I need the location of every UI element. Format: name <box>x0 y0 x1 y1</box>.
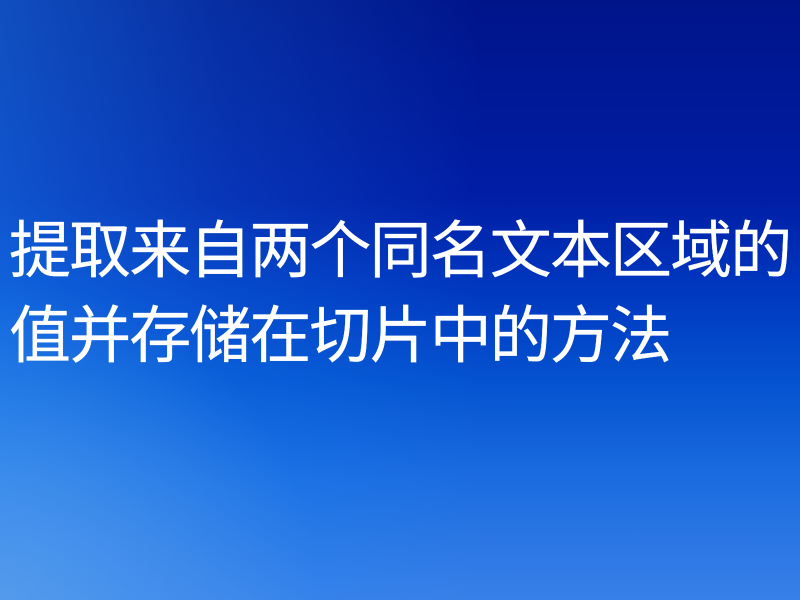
title: 值并存储在切片中的方法 <box>9 302 670 371</box>
title: 提取来自两个同名文本区域的 <box>9 217 790 286</box>
title <box>9 217 790 371</box>
